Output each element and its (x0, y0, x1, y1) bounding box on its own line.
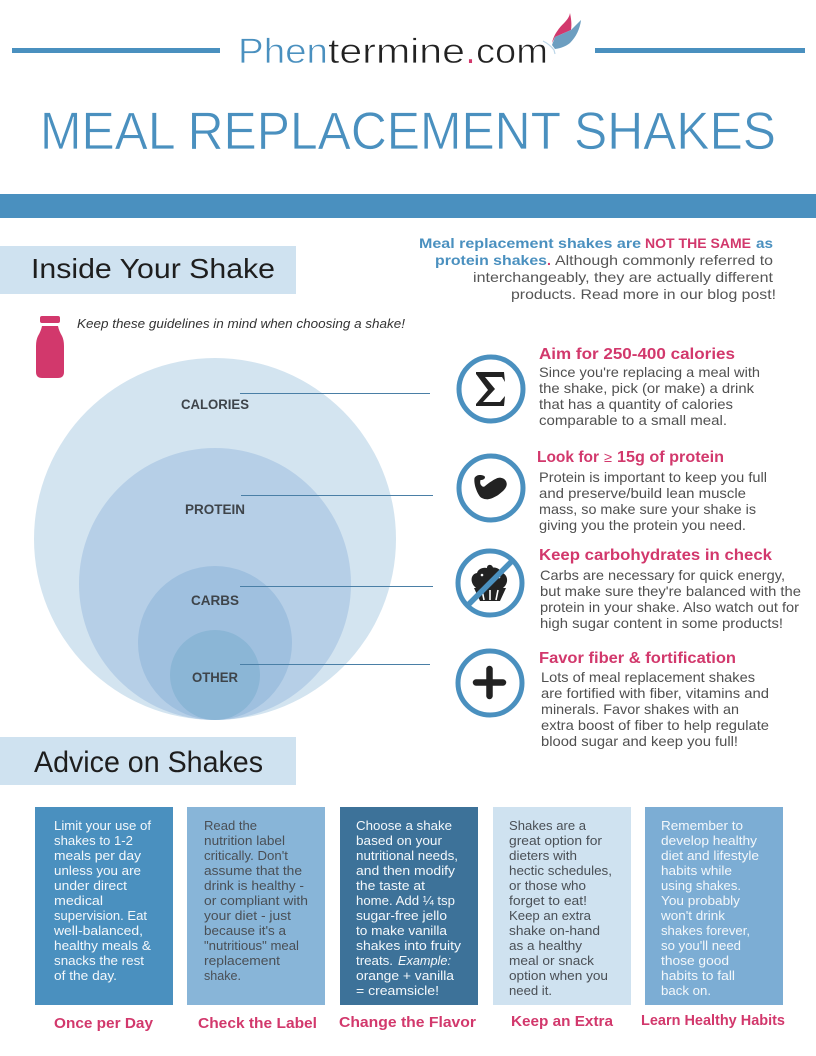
heading (537, 449, 724, 466)
card: learn healthy habits: develop healthy (661, 833, 758, 848)
card: learn healthy habits (645, 807, 783, 1005)
card: change the flavor: = creamsicle! (356, 983, 439, 998)
logo: com (476, 32, 548, 71)
label: carbs: CARBS (191, 593, 239, 608)
intro paragraph: interchangeably, they are actually different (473, 269, 773, 285)
card: keep an extra: as a healthy (509, 938, 583, 953)
card: once per day: unless you are (54, 863, 141, 878)
intro paragraph (419, 235, 776, 302)
card: check the label: replacement (204, 953, 280, 968)
logo: . (466, 32, 475, 71)
guideline: carbohydrates (458, 547, 801, 631)
heading: Inside Your Shake (0, 246, 296, 294)
guideline: calories (459, 346, 760, 428)
caption: learn healthy habits: Learn Healthy Habits (641, 1013, 785, 1029)
card: learn healthy habits: habits while (661, 863, 732, 878)
intro paragraph: Meal replacement shakes are (419, 235, 641, 251)
icon: plus (458, 651, 522, 715)
icon: flexed arm (459, 456, 523, 520)
card: check the label: critically. Don't (204, 848, 288, 863)
label: protein: PROTEIN (185, 502, 245, 517)
guideline: protein (459, 449, 767, 533)
body text: and preserve/build lean muscle (539, 485, 746, 501)
body text: but make sure they're balanced with the (540, 583, 801, 599)
caption: once per day: Once per Day (54, 1016, 153, 1032)
heading: Look for (537, 449, 599, 466)
body text: are fortified with fiber, vitamins and (541, 685, 769, 701)
heading: Keep carbohydrates in check (539, 547, 772, 564)
body text: blood sugar and keep you full! (541, 733, 738, 749)
body text: extra boost of fiber to help regulate (541, 717, 769, 733)
card: keep an extra: need it. (509, 983, 552, 998)
label: calories: CALORIES (181, 397, 249, 412)
heading: ≥ (604, 449, 612, 465)
body text: comparable to a small meal. (539, 412, 727, 428)
card: change the flavor: Choose a shake (356, 818, 452, 833)
body text: mass, so make sure your shake is (539, 501, 756, 517)
card: once per day: healthy meals & (54, 938, 151, 953)
body text: high sugar content in some products! (540, 615, 783, 631)
circle: carbs (138, 566, 292, 720)
heading: Advice on Shakes: Advice on Shakes (34, 746, 263, 779)
circle: calories (34, 358, 396, 720)
circle: other (170, 630, 260, 720)
heading: Advice on Shakes (0, 737, 296, 785)
card: once per day: well-balanced, (53, 923, 143, 938)
body text: Protein is important to keep you full (539, 469, 767, 485)
header rule right (595, 48, 805, 53)
card: keep an extra: Keep an extra (509, 908, 592, 923)
caption: keep an extra: Keep an Extra (511, 1014, 614, 1030)
body text (540, 567, 801, 631)
card: learn healthy habits: diet and lifestyle (661, 848, 759, 863)
icon: sigma (459, 357, 523, 421)
card: change the flavor: orange + vanilla (356, 968, 455, 983)
card: learn healthy habits: Remember to (661, 818, 743, 833)
body text: giving you the protein you need. (539, 517, 746, 533)
caption: check the label: Check the Label (198, 1016, 317, 1032)
card: learn healthy habits: You probably (661, 893, 741, 908)
card: change the flavor: the taste at (356, 878, 425, 893)
card: keep an extra: Shakes are a (509, 818, 587, 833)
card: change the flavor (340, 807, 478, 1005)
card: check the label: or compliant with (204, 893, 308, 908)
card: once per day: snacks the rest (54, 953, 144, 968)
card: learn healthy habits: habits to fall (661, 968, 735, 983)
card: once per day: Limit your use of (54, 818, 151, 833)
logo: Phen (238, 32, 328, 71)
heading: 15g of protein (617, 449, 724, 466)
card: once per day: meals per day (54, 848, 142, 863)
caption: change the flavor: Change the Flavor (339, 1015, 476, 1031)
heading: Inside Your Shake: Inside Your Shake (31, 253, 275, 284)
card: learn healthy habits: using shakes. (661, 878, 741, 893)
body text: minerals. Favor shakes with an (541, 701, 739, 717)
card: keep an extra: option when you (509, 968, 608, 983)
card: learn healthy habits: back on. (661, 983, 711, 998)
body text: that has a quantity of calories (539, 396, 733, 412)
card: check the label: Read the (204, 818, 257, 833)
card: keep an extra: great option for (509, 833, 603, 848)
nested circles chart (34, 358, 433, 720)
card: keep an extra: forget to eat! (509, 893, 587, 908)
card: keep an extra: meal or snack (509, 953, 595, 968)
card: once per day: medical (54, 893, 103, 908)
logo: termine (328, 32, 465, 71)
header band (0, 194, 816, 218)
card: change the flavor: treats. (356, 953, 393, 968)
card: change the flavor: based on your (356, 833, 443, 848)
body text: the shake, pick (or make) a drink (539, 380, 755, 396)
header rule left (12, 48, 220, 53)
card: learn healthy habits: so you'll need (661, 938, 741, 953)
logo (238, 13, 581, 71)
card: change the flavor: to make vanilla (356, 923, 448, 938)
body text (541, 669, 769, 749)
card: learn healthy habits: shakes forever, (661, 923, 750, 938)
card: check the label: nutrition label (204, 833, 285, 848)
card: check the label: because it's a (204, 923, 287, 938)
card: change the flavor: sugar-free jello (356, 908, 447, 923)
card: check the label: your diet - just (204, 908, 291, 923)
card: once per day: supervision. Eat (54, 908, 147, 923)
card: once per day: shakes to 1-2 (54, 833, 133, 848)
intro paragraph: protein shakes (435, 252, 547, 268)
card: change the flavor: shakes into fruity (356, 938, 462, 953)
card: check the label: drink is healthy - (204, 878, 304, 893)
card: once per day (35, 807, 173, 1005)
body text: Carbs are necessary for quick energy, (540, 567, 785, 583)
card: change the flavor: and then modify (356, 863, 456, 878)
card: keep an extra: shake on-hand (509, 923, 600, 938)
body text (539, 469, 767, 533)
icon: bottle (36, 316, 64, 378)
card: once per day: under direct (54, 878, 127, 893)
body text (539, 364, 760, 428)
intro paragraph: NOT THE SAME (645, 235, 751, 251)
card: keep an extra (493, 807, 631, 1005)
card: once per day: of the day. (54, 968, 117, 983)
card: keep an extra: hectic schedules, (509, 863, 612, 878)
heading: Favor fiber & fortification (539, 650, 736, 667)
card: check the label: "nutritious" meal (204, 938, 299, 953)
intro paragraph: as (756, 235, 773, 251)
heading: Aim for 250-400 calories (539, 346, 735, 363)
card: learn healthy habits: won't drink (660, 908, 726, 923)
card: check the label: assume that the (204, 863, 302, 878)
guideline: fiber (458, 650, 769, 749)
card: check the label (187, 807, 325, 1005)
title: MEAL REPLACEMENT SHAKES (40, 102, 776, 161)
card: learn healthy habits: those good (661, 953, 729, 968)
card: check the label: shake. (204, 968, 241, 983)
card: keep an extra: or those who (509, 878, 586, 893)
card: change the flavor: nutritional needs, (356, 848, 458, 863)
intro paragraph: . (547, 252, 551, 268)
circle: protein (79, 448, 351, 720)
body text: Since you're replacing a meal with (539, 364, 760, 380)
intro paragraph: products. Read more in our blog post! (511, 286, 776, 302)
card: change the flavor: home. Add ¼ tsp (356, 893, 455, 908)
intro paragraph: Although commonly referred to (555, 252, 773, 268)
card: keep an extra: dieters with (509, 848, 577, 863)
body text: Lots of meal replacement shakes (541, 669, 755, 685)
card: change the flavor: Example: (398, 953, 451, 968)
icon: crossed-out cupcake (458, 551, 522, 615)
guideline note: Keep these guidelines in mind when choosing a shake! (77, 317, 406, 331)
label: other: OTHER (192, 670, 238, 685)
body text: protein in your shake. Also watch out for (540, 599, 799, 615)
